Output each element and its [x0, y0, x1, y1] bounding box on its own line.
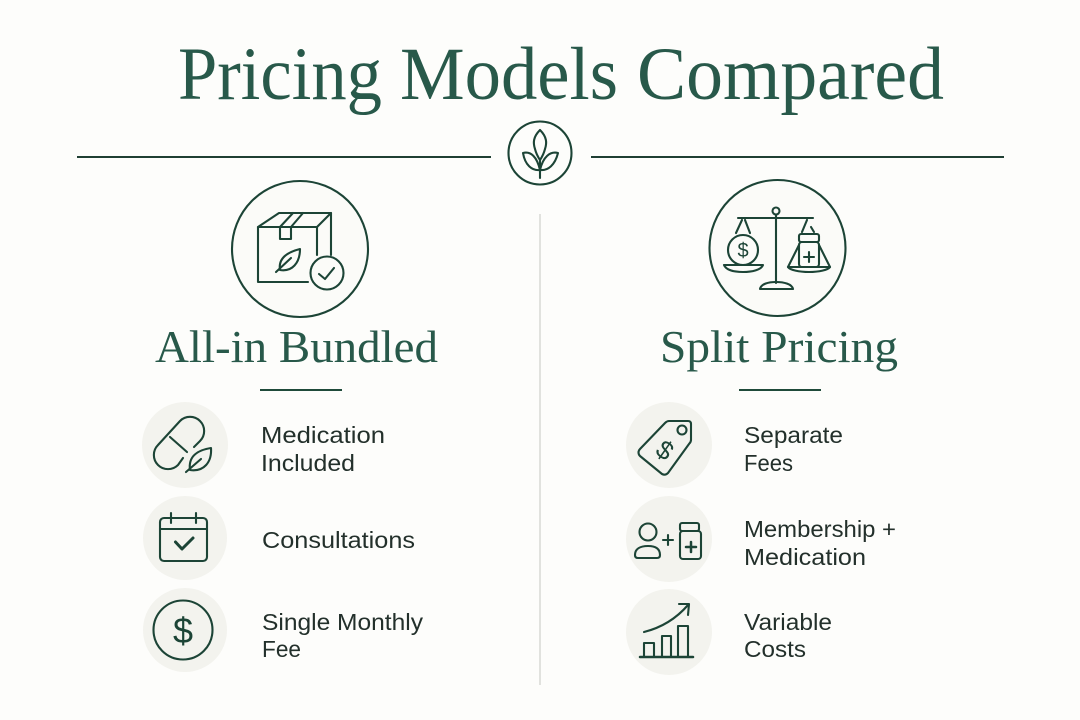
header divider with leaf emblem: [77, 122, 1004, 184]
item: separate fees: [626, 402, 843, 488]
icon: sprout emblem: [508, 122, 572, 184]
centre column divider: [539, 214, 541, 685]
icon: balance scale: $: [737, 240, 749, 262]
item: medication included: Medication: [261, 422, 385, 448]
item: single monthly fee: Fee: [262, 636, 301, 662]
item: medication included: Included: [261, 450, 355, 476]
item: variable costs: Variable: [744, 609, 832, 635]
item: separate fees: Separate: [744, 422, 843, 448]
item: separate fees: $: [650, 434, 680, 467]
item: variable costs: Costs: [744, 636, 806, 662]
item: single monthly fee: $: [173, 610, 193, 651]
title: Models: [400, 33, 618, 116]
title: Compared: [637, 33, 944, 116]
item: membership + medication: Membership +: [744, 516, 896, 542]
item: membership + medication: Medication: [744, 544, 866, 570]
icon: box with leaf and check: [232, 181, 368, 317]
item: membership + medication: [626, 496, 896, 582]
item: variable costs: [626, 589, 832, 675]
item: separate fees: Fees: [744, 450, 793, 476]
item: single monthly fee: Single Monthly: [262, 609, 424, 635]
title: Pricing: [178, 33, 382, 116]
panel: split pricing: [626, 180, 898, 675]
item: consultations: [143, 496, 415, 580]
icon: balance scale: [710, 180, 846, 316]
heading: all-in bundled: All-in Bundled: [155, 321, 438, 372]
panel: all-in bundled: [142, 181, 438, 672]
item: medication included: [142, 402, 385, 488]
item: consultations: Consultations: [262, 527, 415, 553]
heading: split pricing: Split Pricing: [660, 321, 898, 372]
item: single monthly fee: [143, 588, 424, 672]
